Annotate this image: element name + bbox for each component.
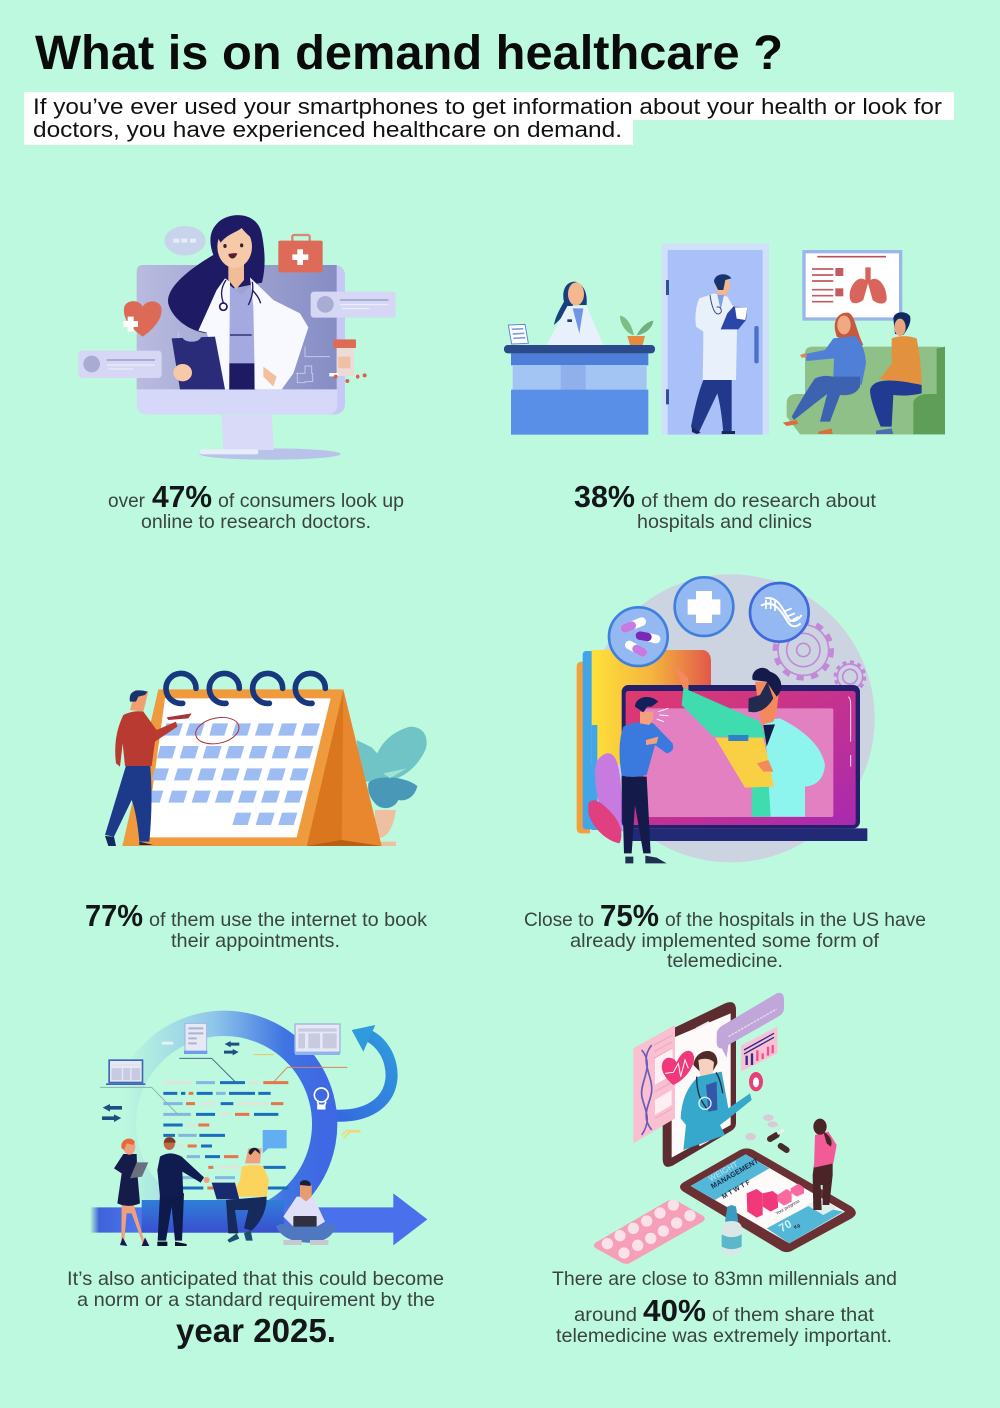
over 47% caption: online to research doctors. [141,511,371,533]
40% caption: There are close to 83mn millennials and [552,1268,897,1290]
seated man [870,312,922,434]
tablet with weight management app: M T W T F [721,1179,752,1201]
phone with doctor [663,1002,752,1167]
tablet with weight management app: Kg [793,1222,801,1230]
icon: blood drop [749,1072,763,1091]
doctor with clipboard [691,274,747,434]
year 2025 caption [67,1268,444,1349]
icon: monitor screen [295,1024,340,1055]
38% caption: of them do research about [641,490,877,512]
reception desk [504,345,655,435]
38% caption: 38% [574,479,635,514]
green sofa [787,347,945,434]
man with laptop, sitting [212,1148,269,1243]
pill blister pack [594,1199,705,1264]
year 2025 caption: It’s also anticipated that this could become [67,1268,444,1290]
75% caption: telemedicine. [667,950,783,972]
intro text block: doctors, you have experienced healthcare on demand. [33,117,622,142]
75% caption: of the hospitals in the US have [665,909,926,931]
man with pencil [105,690,192,846]
door [662,243,769,435]
timeline code lines [163,1083,288,1188]
icon: receptionist [547,282,603,345]
icon: folder [577,650,711,833]
40% caption: telemedicine was extremely important. [556,1325,892,1347]
77% caption: 77% [85,898,143,933]
icon: gears [775,622,865,691]
tablet with weight management app: Your progress [775,1198,800,1216]
icon: desk plant [620,316,653,345]
75% caption: 75% [600,898,659,933]
seated woman [783,313,866,434]
38% caption [574,479,877,533]
icon: medical cross bubble [675,577,733,636]
intro text block: If you’ve ever used your smartphones to get information about your health or look for [33,94,943,119]
illustration: agile development cycle [90,1023,427,1246]
over 47% caption [108,479,404,533]
over 47% caption: 47% [152,479,212,514]
speech bubble [717,993,784,1058]
icon: chat square [162,1042,361,1153]
wall chart of lungs [802,250,902,321]
illustration: hospital reception, doctor and waiting room [504,243,945,435]
curved arrow [330,1025,392,1116]
75% caption: already implemented some form of [570,930,880,952]
illustration: telemedicine laptop [577,574,875,863]
tablet with weight management app: 70 [777,1218,794,1235]
38% caption: hospitals and clinics [637,511,812,533]
illustration: mobile health apps isometric [594,993,856,1264]
77% caption [85,898,427,952]
woman with tablet [114,1139,149,1246]
icon: plant [357,727,427,846]
tablet with weight management app: WEIGHT [707,1160,740,1183]
bar chart card [741,1027,777,1072]
intro text block [24,92,954,145]
pills [745,1114,787,1150]
icon: pills bubble [609,607,668,666]
icon: desk tablet [508,324,528,344]
tablet with weight management app [680,1148,856,1252]
75% caption [524,898,926,972]
illustration: doctor on computer monitor [78,215,396,460]
connector lines [100,1055,347,1115]
patient coughing [620,697,673,863]
77% caption: their appointments. [171,930,340,952]
icon: laptop screen [106,1059,145,1085]
woman standing on scale [807,1119,837,1215]
year 2025 caption: year 2025. [176,1312,336,1349]
person cross-legged with laptop [276,1180,336,1245]
over 47% caption: of consumers look up [218,490,404,512]
tablet with weight management app: MANAGEMENT [709,1156,760,1191]
year 2025 caption: a norm or a standard requirement by the [77,1289,435,1311]
icon: calendar [122,673,382,846]
40% caption: around [574,1304,637,1326]
icon: document screen [184,1023,207,1054]
bottom arrow [90,1193,427,1245]
77% caption: of them use the internet to book [149,909,427,931]
man in suit [157,1137,210,1246]
title: What is on demand healthcare ? [35,27,783,80]
icon: exchange arrows [102,1041,239,1122]
pink DNA panel [633,1025,675,1143]
doctor pointing [673,662,825,817]
icon: leaves [588,753,623,843]
40% caption: of them share that [712,1304,875,1326]
over 47% caption: over [108,490,145,512]
laptop [622,685,867,841]
icon: heart [662,1051,694,1085]
illustration: calendar booking [105,673,427,846]
40% caption [552,1268,897,1347]
icon: light bulb [314,1088,328,1109]
75% caption: Close to [524,909,594,931]
40% caption: 40% [643,1293,706,1328]
circular ring [123,1023,325,1213]
eye drop bottle [722,1205,742,1255]
icon: DNA bubble [750,583,809,642]
